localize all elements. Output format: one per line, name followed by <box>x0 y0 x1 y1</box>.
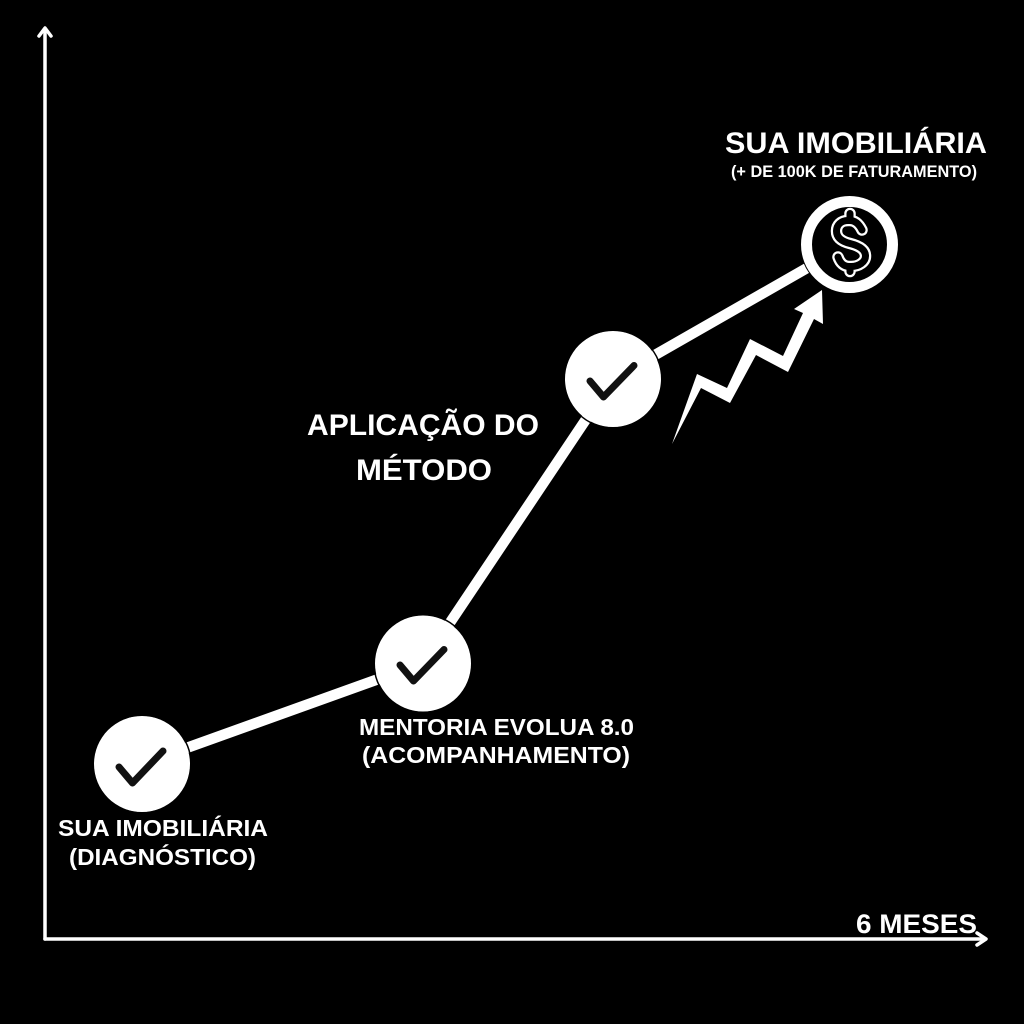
vertical axis arrow <box>39 28 51 939</box>
label: sua imobiliaria diagnostico <box>58 814 268 870</box>
label: 6 meses: 6 MESES <box>856 909 977 939</box>
subheading: faturamento: (+ DE 100K DE FATURAMENTO) <box>731 163 977 181</box>
heading: sua imobiliaria goal: SUA IMOBILIÁRIA <box>725 126 987 160</box>
icon: check node diagnostico <box>93 715 191 813</box>
icon: zigzag growth arrow <box>672 290 823 444</box>
label: aplicacao do metodo <box>307 408 539 487</box>
label: sua imobiliaria diagnostico: SUA IMOBILIÁRIA <box>58 814 268 841</box>
label: aplicacao do metodo: MÉTODO <box>356 453 492 487</box>
icon: dollar coin <box>800 195 899 294</box>
growth line <box>142 244 849 764</box>
icon: check node metodo <box>564 330 662 428</box>
label: aplicacao do metodo: APLICAÇÃO DO <box>307 408 539 442</box>
icon: check node mentoria <box>374 614 472 712</box>
label: mentoria evolua: MENTORIA EVOLUA 8.0 <box>359 714 634 740</box>
label: sua imobiliaria diagnostico: (DIAGNÓSTICO) <box>69 843 256 870</box>
label: mentoria evolua <box>359 714 634 768</box>
horizontal axis arrow <box>45 933 986 945</box>
label: mentoria evolua: (ACOMPANHAMENTO) <box>362 742 630 768</box>
